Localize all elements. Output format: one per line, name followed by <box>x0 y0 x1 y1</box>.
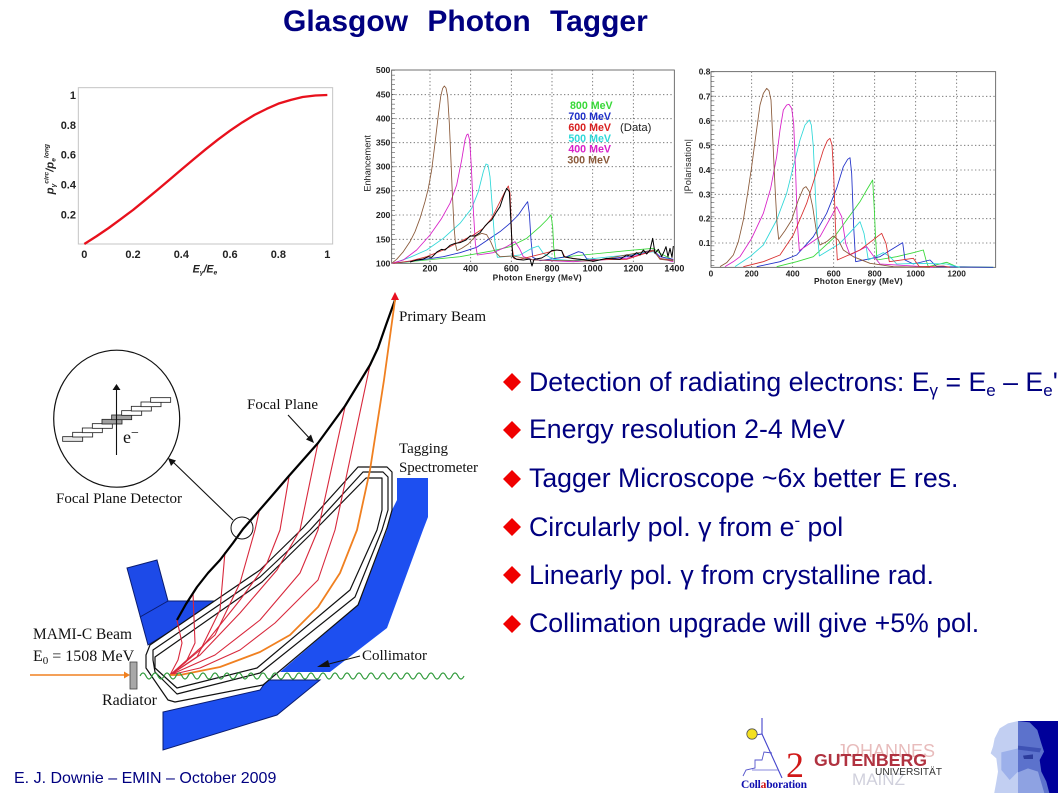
y axis tick labels <box>376 65 391 268</box>
y axis tick labels: 300 <box>376 162 391 172</box>
bullet 6: Collimation upgrade will give +5% pol. <box>529 608 979 638</box>
bullet list <box>503 367 1058 638</box>
curve: 500 MeV <box>393 164 673 263</box>
bullet 1: e <box>986 381 996 400</box>
bullet 1 <box>503 367 1058 400</box>
x axis tick labels: 800 <box>544 263 559 273</box>
curve: 800 MeV <box>393 215 673 263</box>
y axis tick labels: 0.6 <box>699 116 711 126</box>
x axis tick labels: 400 <box>786 268 800 278</box>
logo: Johannes Gutenberg Universität Mainz: UNIVERSITÄT <box>875 766 942 778</box>
y axis tick labels: 100 <box>376 258 391 268</box>
label: MAMI-C beam: = 1508 MeV <box>48 648 135 665</box>
y axis tick labels: 0.2 <box>699 214 711 224</box>
curve: 600 MeV <box>393 186 673 263</box>
collimator block right <box>280 478 428 672</box>
y axis title: /p <box>44 162 56 173</box>
label: MAMI-C beam: E <box>33 648 43 665</box>
y axis tick labels <box>699 67 711 248</box>
magnet yoke upper <box>127 560 220 645</box>
x axis title: /E <box>202 263 214 275</box>
x axis tick labels: 400 <box>463 263 478 273</box>
y axis title: p <box>44 187 56 194</box>
radiator <box>130 662 137 689</box>
bullet 4: - <box>794 511 800 530</box>
legend: (Data) <box>620 122 652 134</box>
y axis title: e <box>50 158 57 162</box>
logo: A2 collaboration <box>741 718 808 791</box>
x axis tick labels: 0 <box>81 249 87 261</box>
y axis tick labels: 0.4 <box>61 180 77 192</box>
electron label: − <box>131 426 139 441</box>
label: tagging spectrometer: Tagging <box>399 441 448 457</box>
legend: 600 MeV <box>568 122 612 134</box>
label: MAMI-C beam: 0 <box>43 655 49 667</box>
curve: 300 MeV <box>720 88 930 267</box>
y axis tick labels: 0.6 <box>61 150 76 162</box>
magnet vacuum box outlines <box>146 467 392 702</box>
bullet 4: pol <box>800 512 843 542</box>
label: focal plane: Focal Plane <box>247 397 318 413</box>
x axis tick labels: 0 <box>709 268 714 278</box>
magnifier pointer arrow <box>168 458 233 520</box>
legend: 800 MeV <box>570 100 614 112</box>
chart: circular polarisation transfer <box>44 88 333 276</box>
electron trajectories <box>170 365 370 675</box>
y axis tick labels: 0.7 <box>699 91 711 101</box>
electron label: e <box>123 427 131 447</box>
y axis tick labels: 250 <box>376 186 391 196</box>
bullet 1: e <box>1043 381 1053 400</box>
small circle on focal plane <box>231 517 253 539</box>
x axis tick labels: 1200 <box>947 268 966 278</box>
x axis tick labels <box>81 249 330 261</box>
chart: polarisation vs photon energy <box>683 67 996 286</box>
legend: 300 MeV <box>567 154 611 166</box>
curve: 400 MeV <box>725 104 933 267</box>
x axis tick labels: 1400 <box>664 263 684 273</box>
bullet 5: Linearly pol. γ from crystalline rad. <box>529 560 934 590</box>
label: MAMI-C beam: MAMI-C Beam <box>33 626 132 643</box>
y axis tick labels: 0.2 <box>61 209 76 221</box>
y axis title: |Polarisation| <box>683 139 693 194</box>
x axis tick labels: 600 <box>504 263 519 273</box>
x axis title: E <box>193 263 200 275</box>
focal plane curve <box>177 300 395 620</box>
x axis tick labels: 0.2 <box>125 249 141 261</box>
bullet 2: Energy resolution 2-4 MeV <box>529 414 845 444</box>
photon wave <box>140 673 464 679</box>
logo: Johannes Gutenberg Universität Mainz: GUTENBERG <box>814 750 927 770</box>
logo: Johannes Gutenberg Universität Mainz: MAINZ <box>852 770 905 789</box>
y axis title: long <box>44 144 51 158</box>
y axis tick labels: 1 <box>70 90 76 102</box>
incoming beam arrow <box>30 672 130 678</box>
label: primary beam: Primary Beam <box>399 309 486 325</box>
focal plane magnifier circle <box>54 350 180 487</box>
logo: Johannes Gutenberg Universität Mainz: JOHANNES <box>837 741 935 761</box>
x axis tick labels: 0.4 <box>174 249 190 261</box>
curve: polarisation ratio <box>84 95 327 244</box>
footer credit: E. J. Downie – EMIN – October 2009 <box>14 770 276 787</box>
label: focal plane detector: Focal Plane Detector <box>56 491 182 507</box>
y axis tick labels: 350 <box>376 138 391 148</box>
primary beam <box>170 292 399 675</box>
x axis tick labels: 800 <box>868 268 882 278</box>
bullet 1: Detection of radiating electrons: E <box>529 367 930 397</box>
data: measured 600 MeV <box>410 188 673 266</box>
bullet 1: γ <box>930 381 939 400</box>
label: tagging spectrometer: Spectrometer <box>399 460 478 476</box>
x axis tick labels <box>422 263 684 273</box>
y axis tick labels: 450 <box>376 90 391 100</box>
y axis tick labels: 0.8 <box>61 120 76 132</box>
collimator pointer arrow <box>317 656 360 667</box>
x axis tick labels: 1000 <box>906 268 925 278</box>
legend: 400 MeV <box>568 143 612 155</box>
logo: A2 collaboration: 2 <box>786 745 804 785</box>
y axis tick labels: 0.4 <box>699 165 711 175</box>
bullet 1: = E <box>938 367 986 397</box>
curve: 300 MeV <box>392 86 673 263</box>
legend: 500 MeV <box>568 133 612 145</box>
x axis tick labels: 600 <box>827 268 841 278</box>
curve: 700 MeV <box>393 202 673 263</box>
focal plane pointer arrow <box>288 415 314 443</box>
x axis title: Photon Energy (MeV) <box>493 273 582 283</box>
bullet 4: Circularly pol. γ from e <box>529 512 794 542</box>
y axis tick labels: 0.3 <box>699 189 711 199</box>
y axis title: γ <box>50 183 57 187</box>
x axis tick labels: 0.6 <box>222 249 238 261</box>
magnet yoke lower <box>163 680 320 750</box>
x axis title: e <box>214 269 218 276</box>
y axis tick labels: 400 <box>376 114 391 124</box>
x axis title: γ <box>200 269 204 276</box>
logo: Johannes Gutenberg Universität Mainz <box>814 741 942 789</box>
label: collimator: Collimator <box>362 648 427 664</box>
y axis tick labels: 150 <box>376 234 391 244</box>
x axis tick labels: 1000 <box>583 263 603 273</box>
x axis tick labels: 1 <box>324 249 330 261</box>
y axis tick labels: 0.5 <box>699 140 711 150</box>
label: radiator: Radiator <box>102 692 158 709</box>
chart: enhancement vs photon energy <box>362 65 684 283</box>
legend: 700 MeV <box>568 111 612 123</box>
y axis title: Enhancement <box>362 135 372 192</box>
y axis title: circ <box>44 172 51 184</box>
x axis tick labels: 0.8 <box>271 249 286 261</box>
curve: 400 MeV <box>392 134 673 263</box>
logo: Gutenberg head <box>991 721 1058 793</box>
curve: 700 MeV <box>757 158 993 267</box>
y axis tick labels: 0.1 <box>699 238 711 248</box>
diagram: tagging spectrometer <box>30 292 486 750</box>
y axis tick labels: 0.8 <box>699 67 711 77</box>
electron arrow <box>112 384 120 455</box>
y axis tick labels: 500 <box>376 65 391 75</box>
curve: 800 MeV <box>777 180 993 267</box>
x axis tick labels <box>709 268 966 278</box>
bullet 1: – E <box>996 367 1043 397</box>
curve: 500 MeV <box>735 120 960 267</box>
bullet 1: ' <box>1053 367 1058 397</box>
x axis tick labels: 200 <box>422 263 437 273</box>
y axis tick labels <box>61 90 77 221</box>
title: Glasgow Photon Tagger <box>283 5 648 38</box>
legend <box>567 100 652 166</box>
x axis tick labels: 1200 <box>623 263 643 273</box>
detector ladder <box>63 398 171 441</box>
y axis tick labels: 200 <box>376 210 391 220</box>
curve: 600 MeV <box>743 138 950 267</box>
bullet 3: Tagger Microscope ~6x better E res. <box>529 463 958 493</box>
x axis title: Photon Energy (MeV) <box>814 276 903 286</box>
x axis tick labels: 200 <box>745 268 759 278</box>
logo: A2 collaboration: Collaboration <box>741 779 808 791</box>
